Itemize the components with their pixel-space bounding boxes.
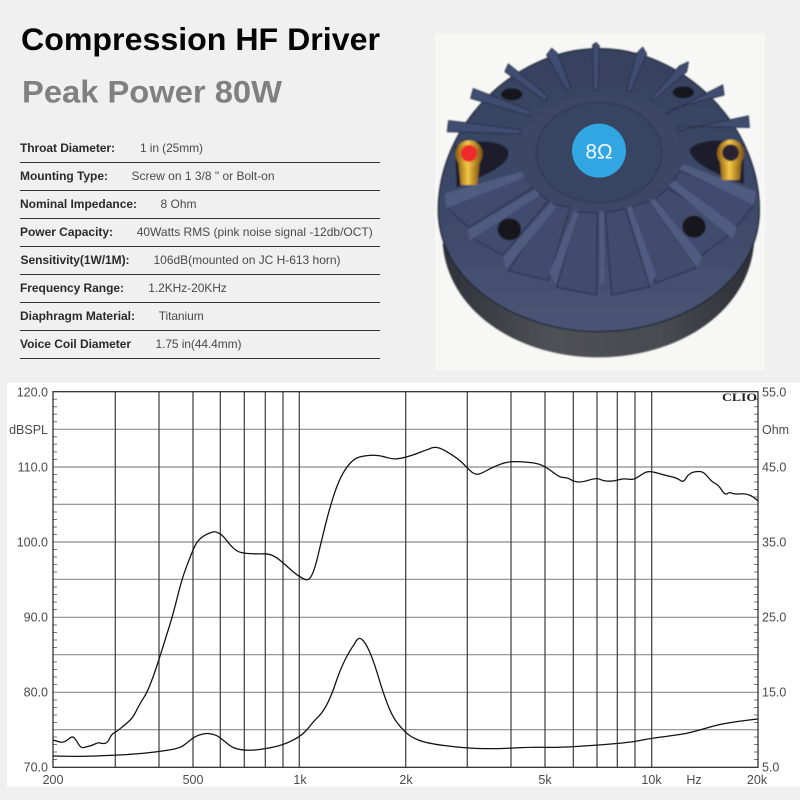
right axis labels: 45.0 (762, 460, 786, 474)
horizontal grid lines (53, 429, 758, 730)
CLIO logo text: CLIO (722, 390, 757, 404)
terminal recess left (455, 142, 509, 187)
red terminal (455, 140, 483, 185)
frequency axis labels: 20k (747, 773, 768, 787)
row: power capacity: Power Capacity: (20, 225, 113, 239)
axis ticks (53, 399, 758, 760)
row: voice coil diameter: 1.75 in(44.4mm) (156, 337, 242, 351)
row: voice coil diameter: Voice Coil Diameter (20, 337, 131, 351)
frequency axis labels: 2k (399, 773, 413, 787)
right axis labels: 25.0 (762, 610, 786, 624)
row: mounting type: Mounting Type: (20, 169, 108, 183)
driver housing (438, 49, 759, 332)
black terminal (717, 140, 744, 180)
row: power capacity (20, 225, 380, 246)
frequency response chart (7, 383, 800, 787)
left axis labels: 110.0 (18, 460, 48, 474)
row: throat diameter (20, 141, 380, 162)
row: sensitivity (20, 253, 380, 274)
left axis labels: 80.0 (24, 686, 48, 700)
frequency axis labels: 200 (43, 773, 63, 787)
subtitle: peak power: Peak Power 80W (22, 74, 282, 110)
specification table (20, 141, 380, 358)
row: throat diameter: 1 in (25mm) (140, 141, 203, 155)
mounting holes (498, 86, 706, 240)
row: frequency range: Frequency Range: (20, 281, 124, 295)
row: sensitivity: Sensitivity(1W/1M): (20, 253, 130, 267)
row: frequency range (20, 281, 380, 302)
frequency axis labels: Hz (686, 773, 702, 787)
centre recessed ring (536, 103, 662, 203)
left axis labels: 90.0 (24, 610, 48, 624)
centre raised disc (517, 96, 681, 211)
row: voice coil diameter (20, 337, 380, 358)
right axis labels: 15.0 (762, 686, 786, 700)
left axis labels: 120.0 (17, 386, 48, 400)
right axis labels: 55.0 (762, 386, 786, 400)
row: throat diameter: Throat Diameter: (20, 141, 115, 155)
row: nominal impedance: 8 Ohm (160, 197, 196, 211)
left axis labels (9, 386, 48, 774)
lower cooling ridges (445, 164, 756, 285)
lower recessed panels (446, 171, 755, 295)
driver base (443, 243, 754, 357)
impedance curve (53, 638, 758, 756)
frequency axis labels: 1k (293, 773, 307, 787)
upper cooling fins (447, 43, 749, 134)
product photo: compression driver (435, 33, 765, 370)
frequency axis labels: 10k (641, 773, 662, 787)
row: frequency range: 1.2KHz-20KHz (148, 281, 227, 295)
row: diaphragm material: Titanium (159, 309, 204, 323)
SPL response curve (53, 447, 758, 748)
row: diaphragm material: Diaphragm Material: (20, 309, 135, 323)
plot frame (53, 392, 758, 767)
row: mounting type: Screw on 1 3/8 " or Bolt-on (132, 169, 274, 183)
title: Compression HF Driver (21, 21, 380, 57)
left axis labels: 70.0 (24, 760, 48, 774)
row: sensitivity: 106dB(mounted on JC H-613 horn) (154, 253, 340, 267)
chart background (7, 383, 800, 786)
frequency axis labels: 500 (183, 773, 203, 787)
frequency axis labels (43, 773, 768, 787)
frequency axis labels: 5k (538, 773, 552, 787)
row: diaphragm material (20, 309, 380, 330)
terminal recess right (689, 140, 744, 184)
left axis labels: 100.0 (17, 536, 48, 550)
right axis labels: 5.0 (762, 760, 779, 774)
row: nominal impedance: Nominal Impedance: (20, 197, 137, 211)
right axis labels: Ohm (762, 423, 789, 437)
vertical grid lines (115, 392, 652, 767)
row: power capacity: 40Watts RMS (pink noise signal -12db/OCT) (137, 225, 373, 239)
left axis labels: dBSPL (9, 423, 48, 437)
right axis labels (762, 386, 789, 774)
right axis labels: 35.0 (762, 536, 786, 550)
row: mounting type (20, 169, 380, 190)
impedance badge (572, 124, 626, 178)
row: nominal impedance (20, 197, 380, 218)
impedance badge: 8Ω (585, 140, 613, 163)
